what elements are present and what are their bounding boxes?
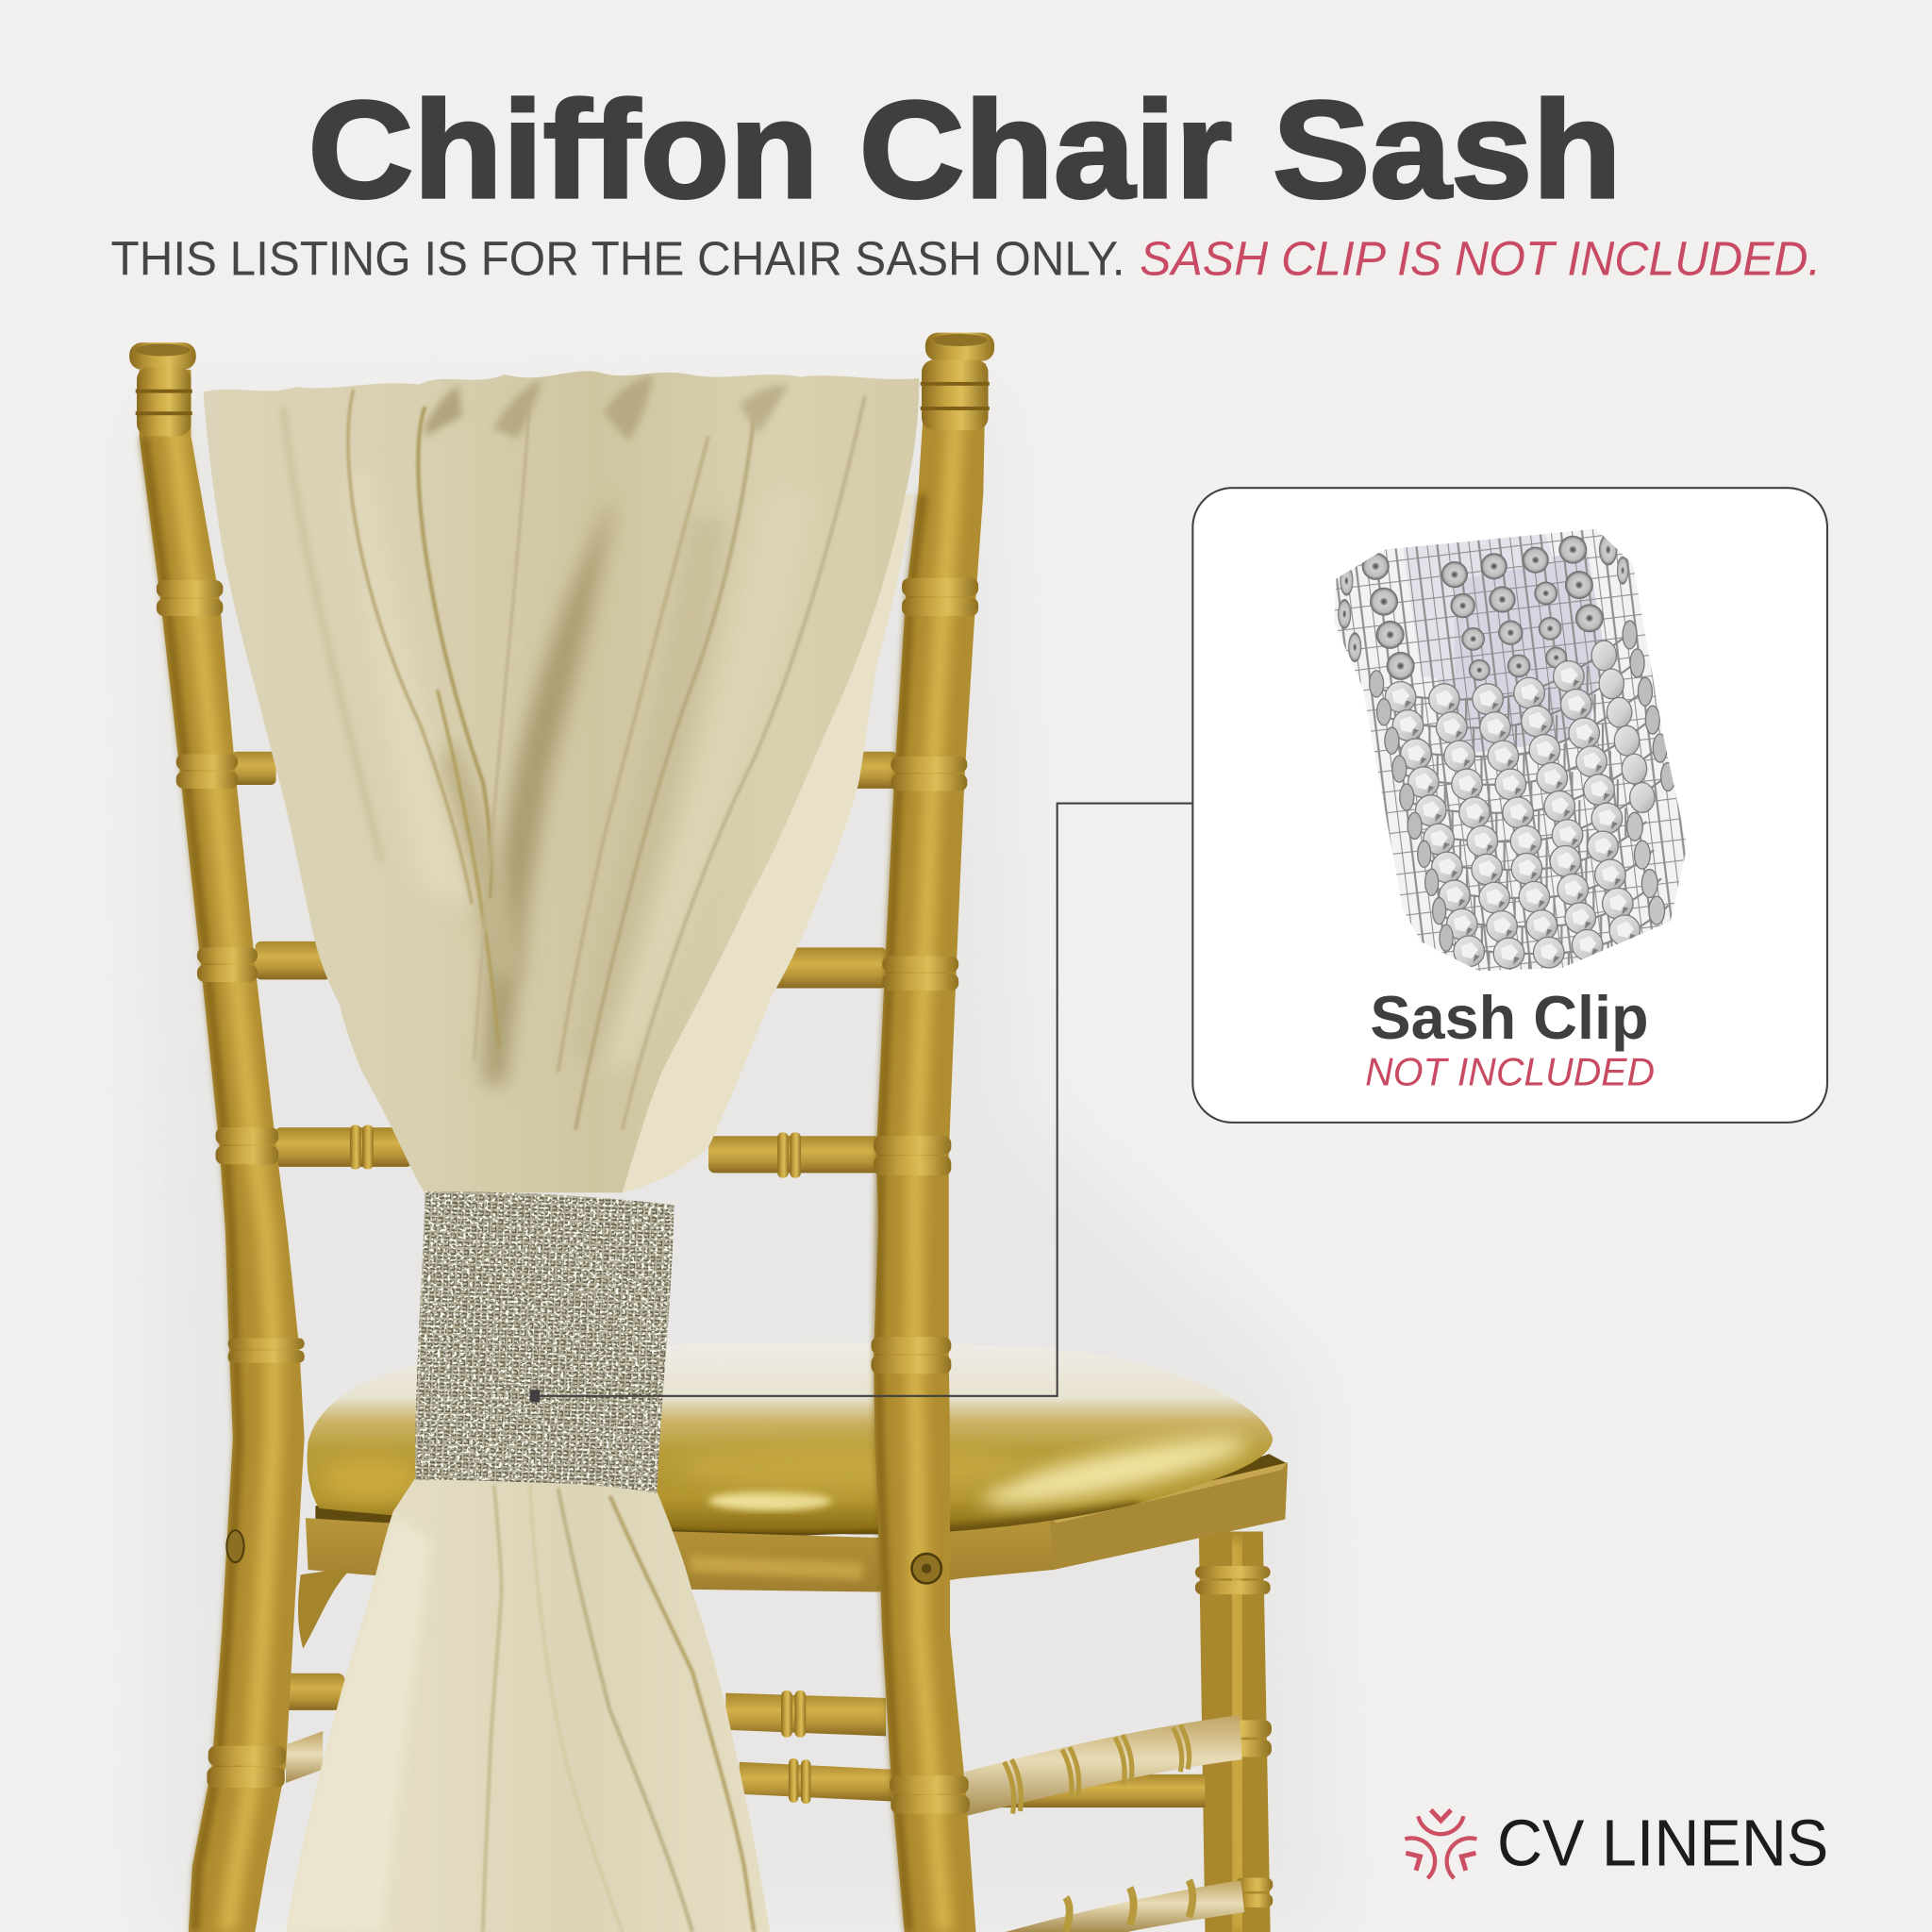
sash clip label: Sash Clip: [1370, 983, 1649, 1052]
right chair post: [871, 333, 994, 1932]
left chair post: [129, 342, 305, 1932]
upper chiffon sash: [185, 358, 937, 1208]
rear sheer layer of sash: [623, 492, 913, 1192]
panel: sash clip callout: [1192, 488, 1827, 1123]
subtitle: THIS LISTING IS FOR THE CHAIR SASH ONLY.: [111, 231, 1124, 285]
seat under-shadow gap: [315, 1454, 1288, 1541]
back rest rungs: [232, 752, 897, 1178]
subtitle warning: SASH CLIP IS NOT INCLUDED.: [1140, 231, 1821, 285]
logo: CV Linens: [1400, 1806, 1828, 1881]
bottom diagonal stretcher rung: [1006, 1880, 1244, 1932]
pale diagonal stretcher rung: [965, 1715, 1242, 1816]
back rung: [974, 1774, 1205, 1807]
gold seat cushion: [308, 1363, 1274, 1534]
icon: three-fold logo mark: [1400, 1810, 1482, 1881]
title: Chiffon Chair Sash: [308, 73, 1622, 226]
seat frame: [298, 1462, 1288, 1649]
sash clip product image: [1330, 523, 1695, 981]
not included label: NOT INCLUDED: [1365, 1050, 1655, 1094]
back right leg: [1195, 1532, 1273, 1932]
lower chiffon sash: [277, 1473, 782, 1932]
callout connector line: [530, 804, 1192, 1402]
rear sheer left layer: [228, 542, 382, 1003]
logo wordmark: CV LINENS: [1497, 1806, 1828, 1879]
rhinestone band wrap: [415, 1191, 674, 1493]
lower chair rungs: [278, 1674, 892, 1804]
soft backdrop shadow behind chair: [148, 394, 1331, 1932]
chair photograph: [129, 333, 1331, 1932]
